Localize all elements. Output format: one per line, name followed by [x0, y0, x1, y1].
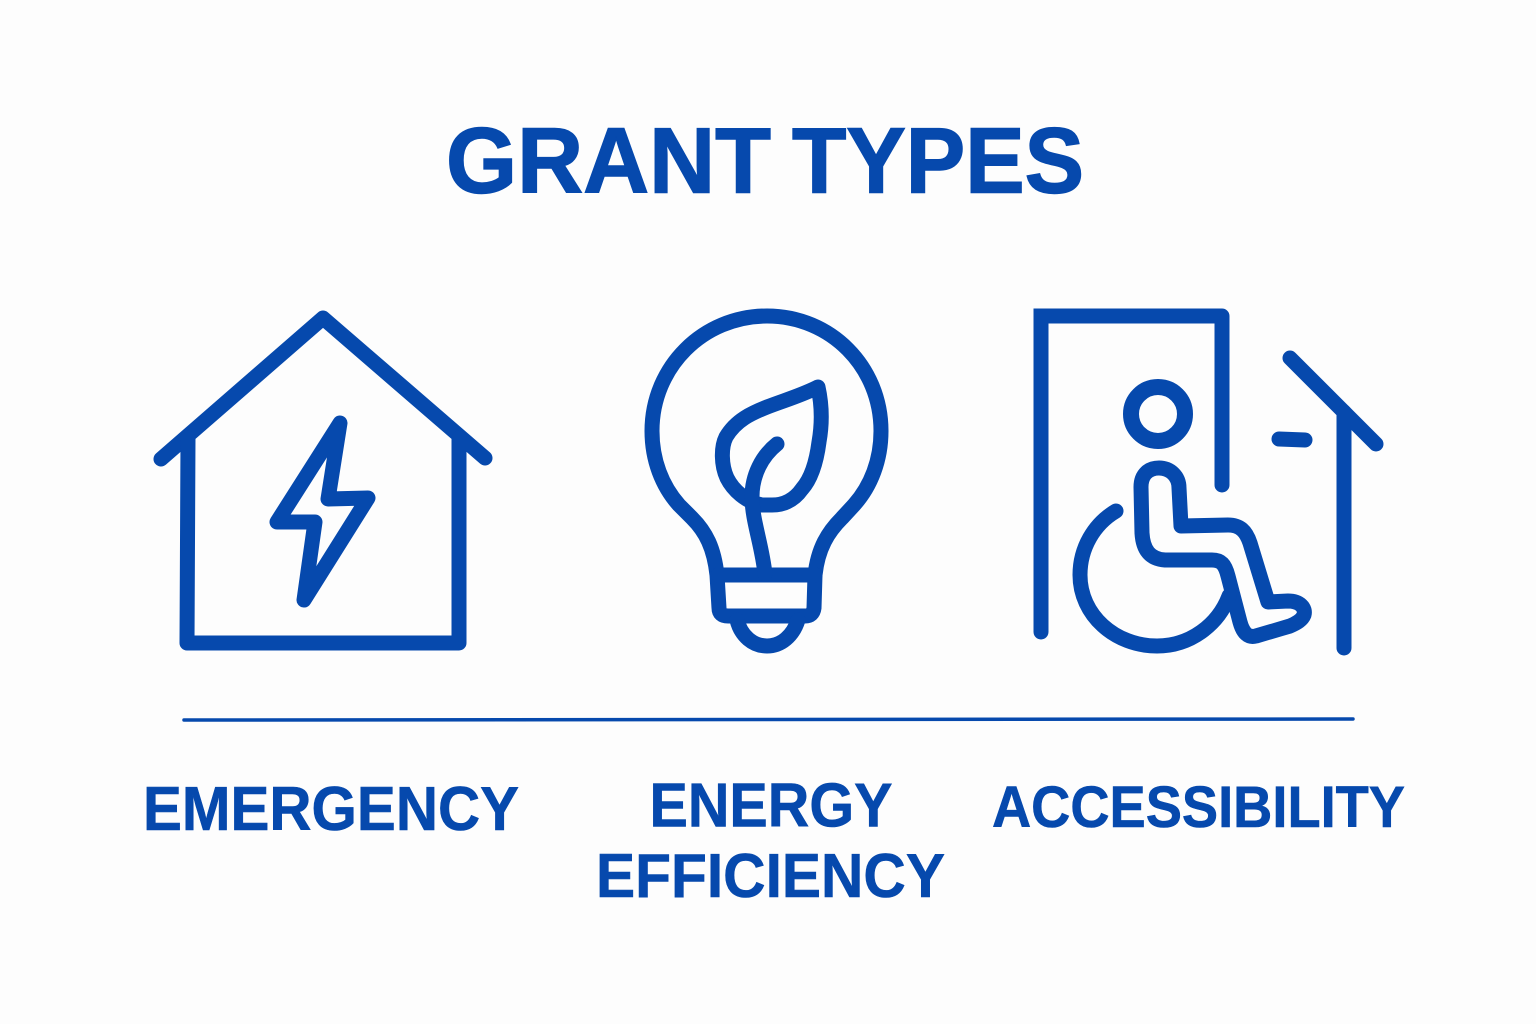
- title: GRANT: [446, 108, 771, 212]
- icon: house with lightning bolt: [161, 318, 485, 643]
- label: energy efficiency: [596, 772, 945, 911]
- house roof: [161, 318, 485, 459]
- bulb glass and base: [652, 316, 881, 616]
- ramp post: [1336, 412, 1352, 648]
- label: energy efficiency: ENERGY: [650, 772, 892, 840]
- bulb cap: [737, 620, 798, 646]
- lightning bolt: [277, 423, 368, 600]
- ramp roof line: [1290, 358, 1376, 444]
- house walls: [187, 438, 459, 643]
- title: [446, 108, 1084, 212]
- icon: light bulb with leaf: [652, 316, 881, 646]
- person body and chair: [1141, 468, 1304, 636]
- door frame: [1041, 316, 1222, 632]
- leaf: [722, 387, 821, 505]
- label: emergency: EMERGENCY: [143, 775, 519, 844]
- icon: doorway and wheelchair user: [1034, 308, 1376, 648]
- person head: [1131, 387, 1185, 441]
- bulb collar: [718, 568, 815, 582]
- label: energy efficiency: EFFICIENCY: [596, 842, 945, 911]
- wheel: [1080, 511, 1229, 646]
- door corner: [1034, 308, 1042, 316]
- title: TYPES: [792, 108, 1084, 212]
- sign dash: [1279, 439, 1305, 440]
- leaf stem: [752, 444, 777, 574]
- label: accessibility: ACCESSIBILITY: [992, 775, 1405, 840]
- divider: [184, 719, 1353, 720]
